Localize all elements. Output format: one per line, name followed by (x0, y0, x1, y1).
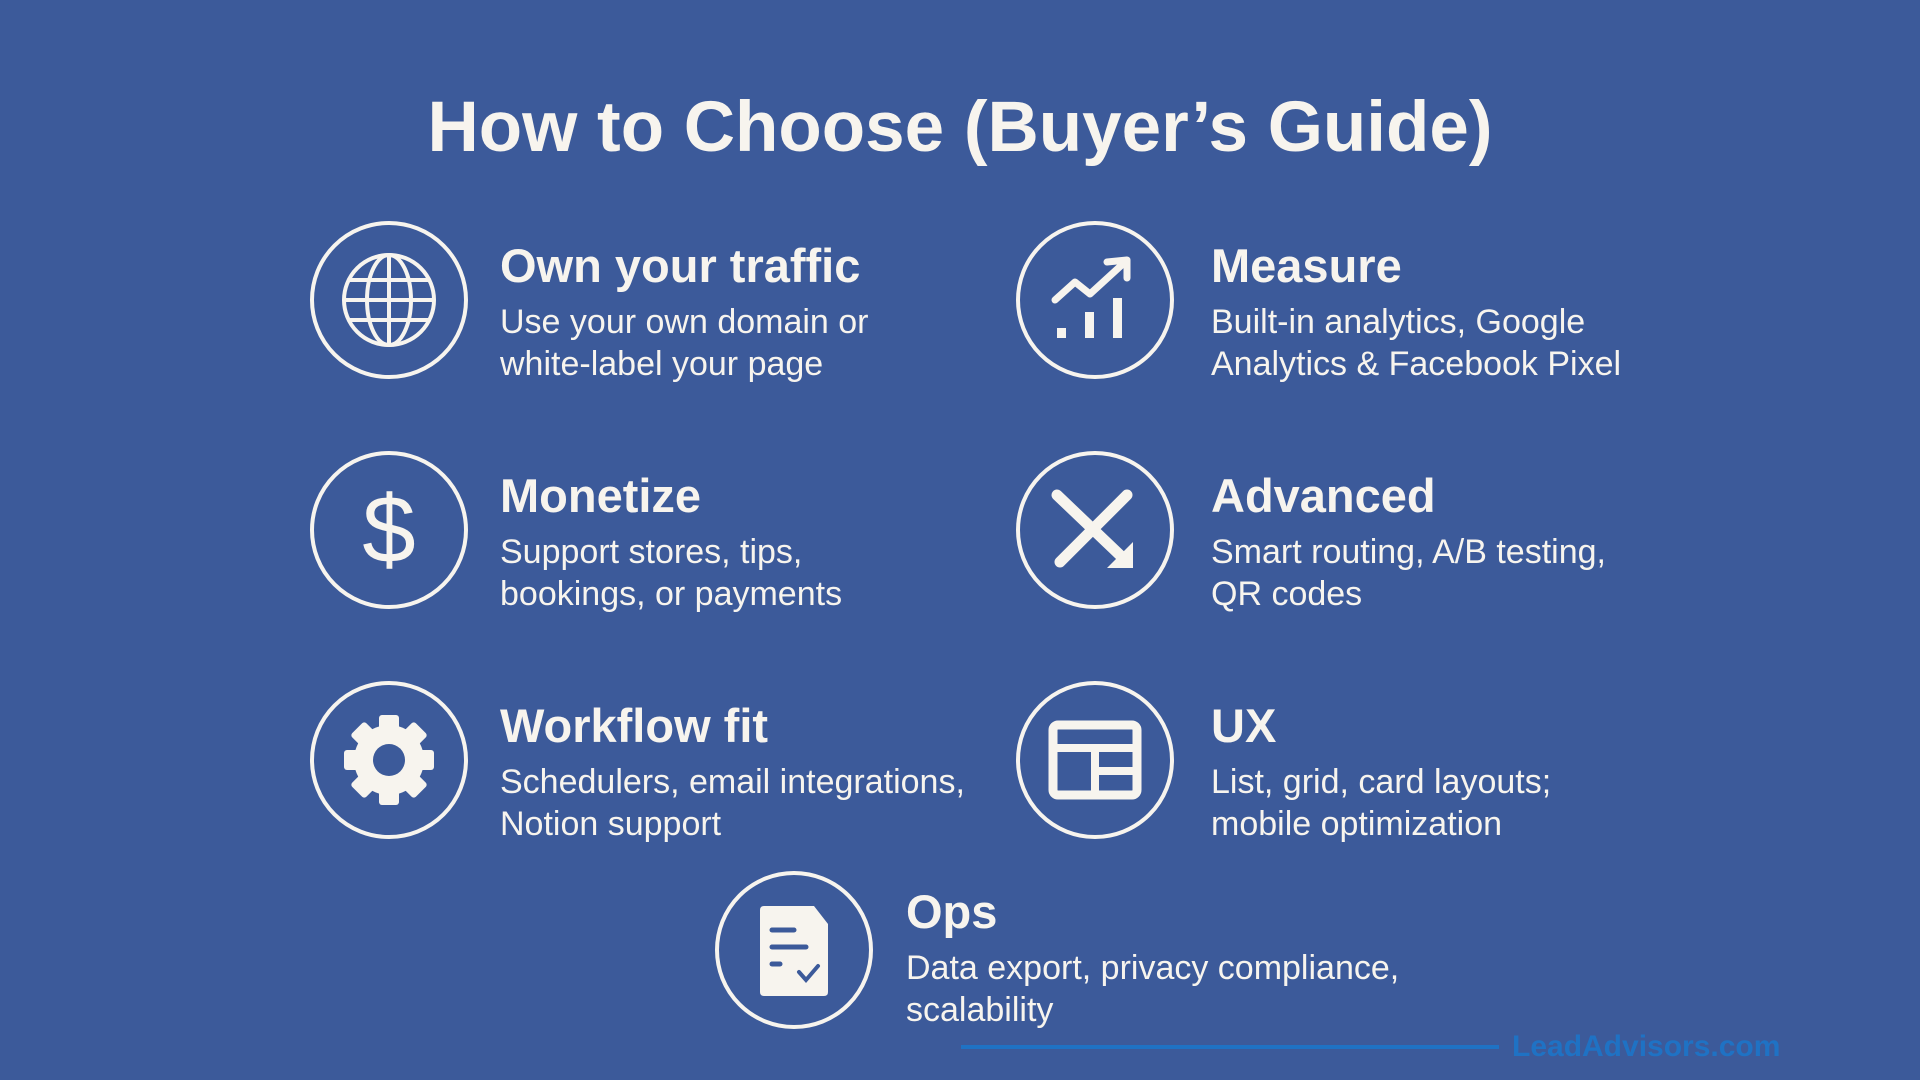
icon: dollar (310, 451, 468, 609)
text: own your traffic: Own your traffic (500, 239, 860, 292)
text: ux: mobile optimization (1211, 805, 1502, 843)
text: measure (1211, 239, 1621, 383)
text: workflow fit: Schedulers, email integrations, (500, 763, 965, 801)
text: ops: Ops (906, 885, 997, 938)
text: monetize (500, 469, 842, 613)
text: own your traffic (500, 239, 869, 383)
text: own your traffic: Use your own domain or (500, 303, 869, 341)
text: ux: List, grid, card layouts; (1211, 763, 1551, 801)
icon: layout (1016, 681, 1174, 839)
icon: chart (1016, 221, 1174, 379)
icon: dollar: $ (362, 476, 416, 583)
text: ux: UX (1211, 699, 1276, 752)
text: workflow fit: Workflow fit (500, 699, 768, 752)
text: advanced: Advanced (1211, 469, 1436, 522)
text: ux (1211, 699, 1551, 843)
text: ops (906, 885, 1399, 1029)
icon: globe (310, 221, 468, 379)
brand: LeadAdvisors.com: LeadAdvisors.com (1512, 1030, 1780, 1063)
text: monetize: bookings, or payments (500, 575, 842, 613)
text: advanced: Smart routing, A/B testing, (1211, 533, 1606, 571)
icon: routing (1016, 451, 1174, 609)
icon: gear (310, 681, 468, 839)
title: How to Choose (Buyer’s Guide) (427, 88, 1493, 167)
footer line (961, 1045, 1499, 1049)
text: monetize: Support stores, tips, (500, 533, 802, 571)
icon: document (715, 871, 873, 1029)
text: workflow fit: Notion support (500, 805, 721, 843)
text: advanced (1211, 469, 1606, 613)
text: measure: Measure (1211, 239, 1402, 292)
text: ops: scalability (906, 991, 1053, 1029)
text: workflow fit (500, 699, 965, 843)
text: monetize: Monetize (500, 469, 701, 522)
text: measure: Analytics & Facebook Pixel (1211, 345, 1621, 383)
text: ops: Data export, privacy compliance, (906, 949, 1399, 987)
text: own your traffic: white-label your page (500, 345, 823, 383)
text: advanced: QR codes (1211, 575, 1362, 613)
text: measure: Built-in analytics, Google (1211, 303, 1585, 341)
